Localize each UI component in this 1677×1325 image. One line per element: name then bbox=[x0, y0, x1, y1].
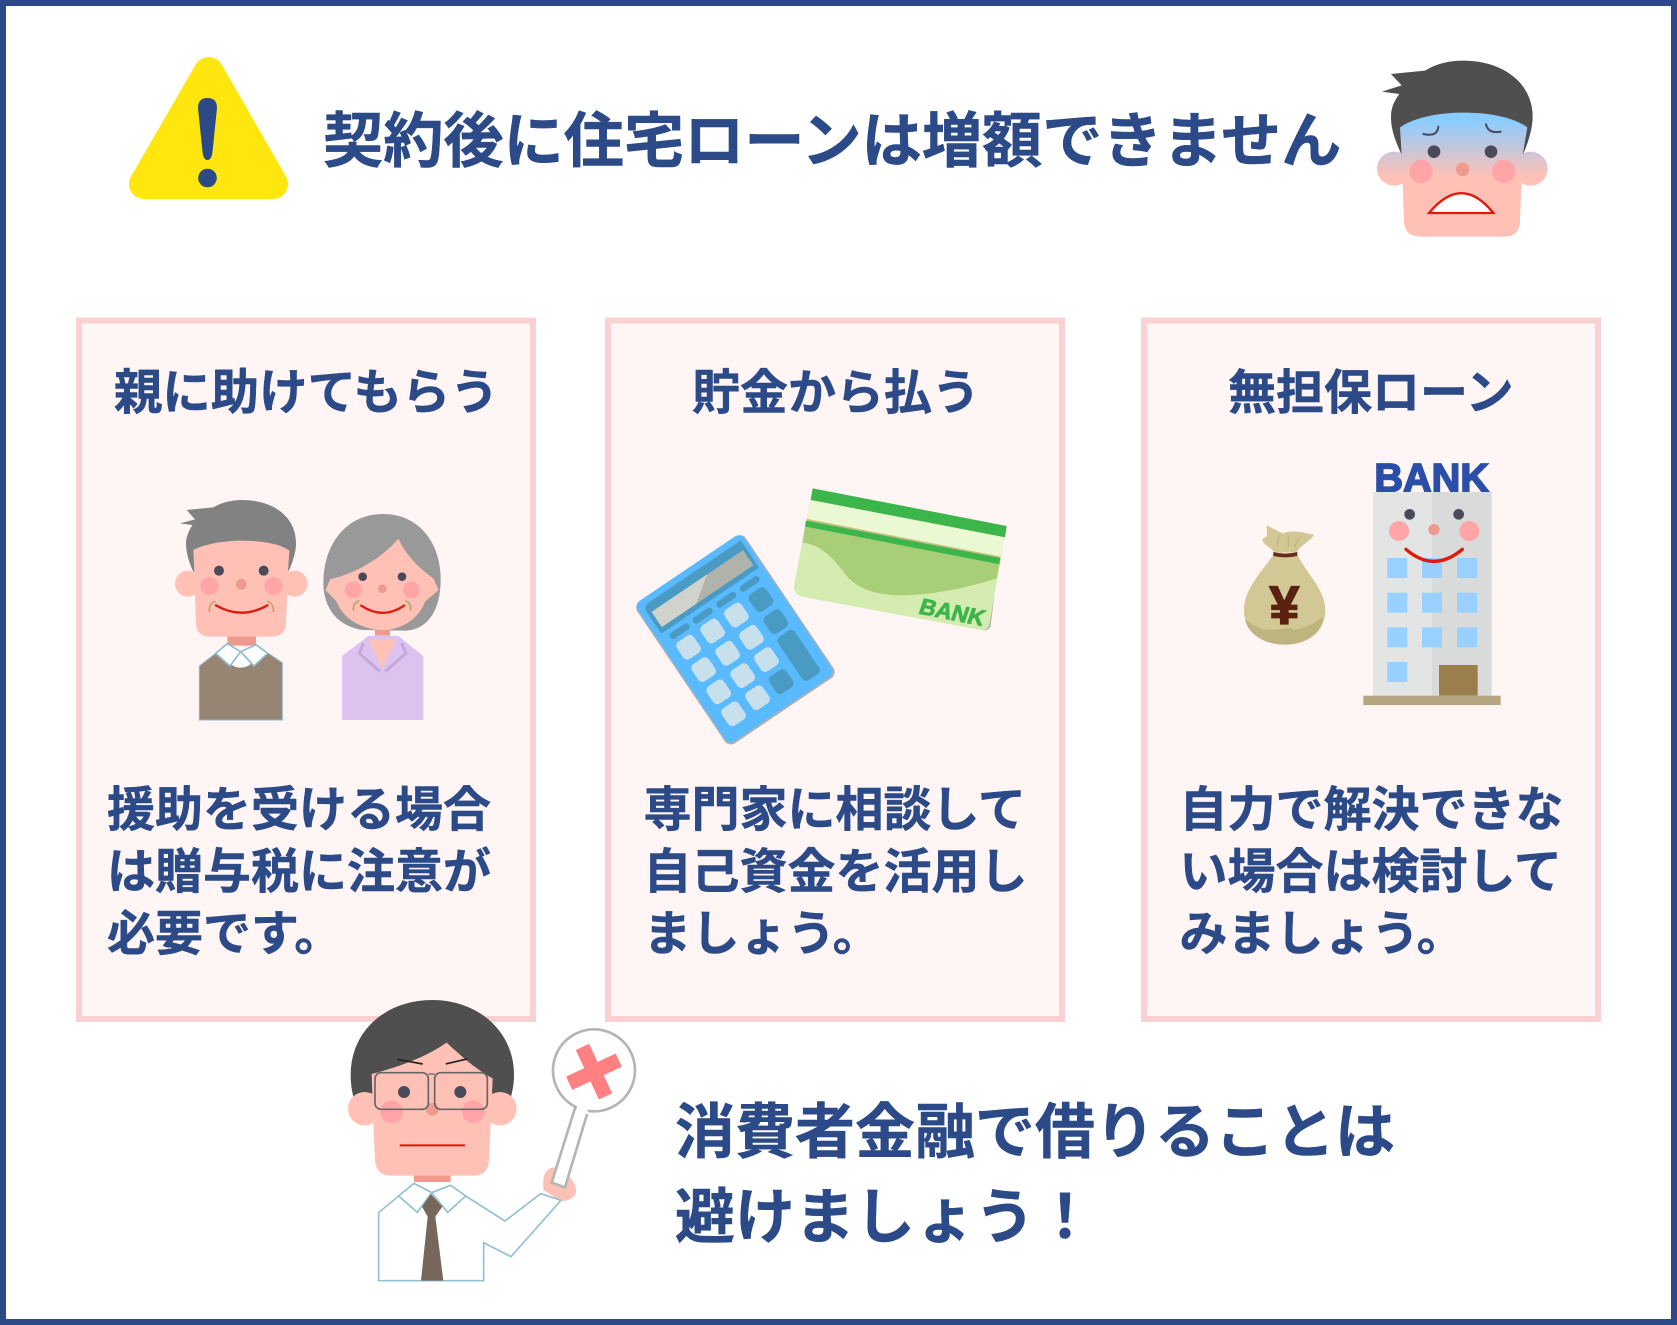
icon: smiling bank building bbox=[1363, 456, 1501, 705]
panel heading: 親に助けてもらう bbox=[114, 366, 499, 420]
panel body text: みましょう。 bbox=[1180, 908, 1465, 961]
title: 契約後に住宅ローンは増額できません bbox=[323, 108, 1341, 175]
icon: smiling bank building: BANK bbox=[1374, 456, 1489, 500]
panel body text: ましょう。 bbox=[644, 908, 881, 961]
icon: bank book: BANK bbox=[916, 593, 989, 631]
panel body text: 専門家に相談して bbox=[644, 784, 1026, 837]
panel: unsecured loan bbox=[1144, 320, 1598, 1019]
icon: calculator bbox=[633, 532, 838, 747]
panel body text: い場合は検討して bbox=[1180, 846, 1562, 899]
panel: help from parents bbox=[79, 320, 533, 1019]
icon: bank book bbox=[794, 488, 1007, 631]
panel body text: 自己資金を活用し bbox=[644, 846, 1028, 899]
panel heading: 貯金から払う bbox=[692, 367, 980, 420]
icon: money bag: ¥ bbox=[1269, 576, 1299, 635]
panel: pay from savings bbox=[608, 320, 1062, 1019]
closing message: 消費者金融で借りることは bbox=[675, 1099, 1395, 1166]
panel body text: 援助を受ける場合 bbox=[107, 784, 491, 837]
panel body text: 必要です。 bbox=[107, 908, 342, 961]
panel heading: 無担保ローン bbox=[1228, 367, 1514, 420]
icon: worried man face bbox=[1377, 61, 1548, 237]
icon: man holding a cross sign bbox=[348, 1000, 635, 1281]
icon: money bag bbox=[1244, 525, 1325, 645]
closing message: 避けましょう！ bbox=[675, 1184, 1095, 1251]
panel body text: は贈与税に注意が bbox=[107, 846, 491, 899]
panel body text: 自力で解決できな bbox=[1180, 784, 1564, 837]
icon: elderly couple bbox=[175, 500, 441, 720]
icon: warning triangle bbox=[144, 72, 273, 187]
